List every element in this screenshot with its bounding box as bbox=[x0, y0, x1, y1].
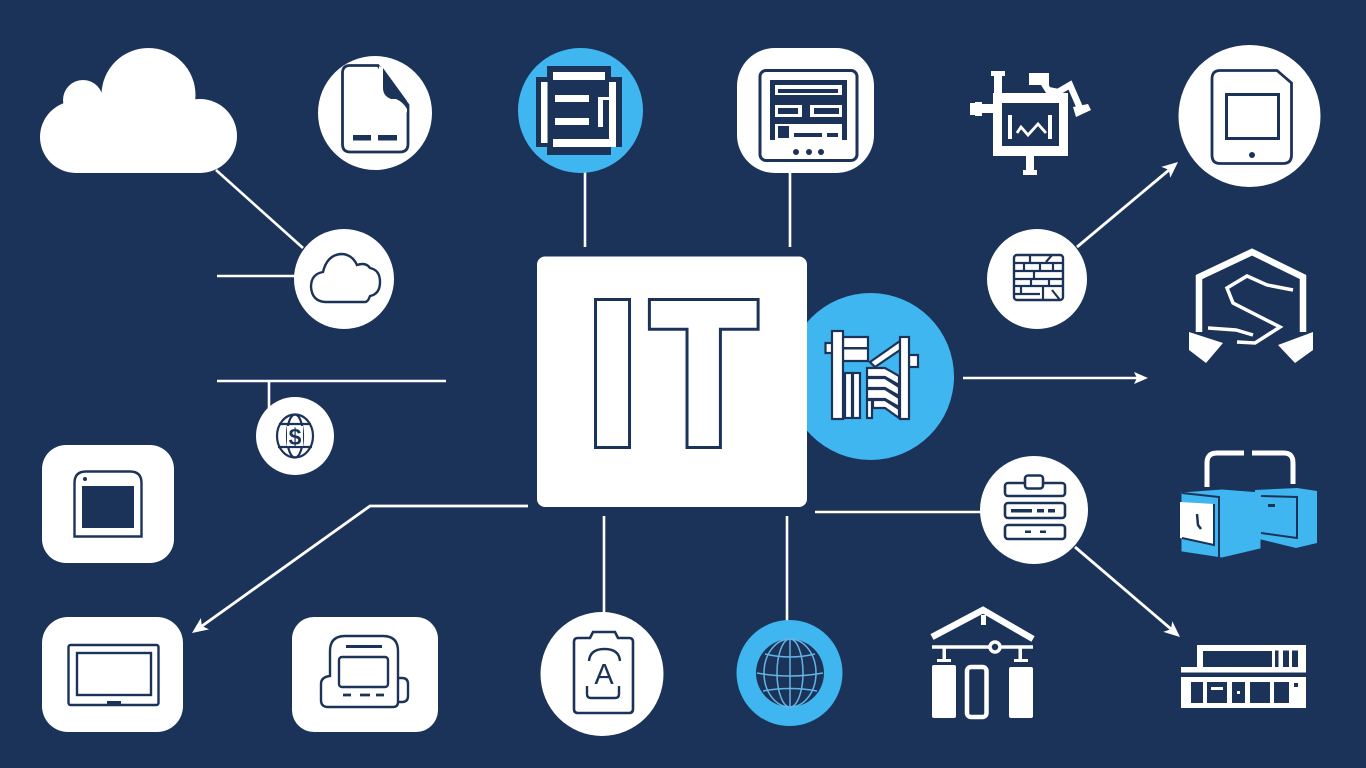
icon: blue circle with chart gate bbox=[787, 293, 954, 460]
connector lines bbox=[216, 170, 984, 622]
arrow: server circle to rack bbox=[1075, 547, 1180, 637]
icon: tablet circle bbox=[1178, 45, 1320, 187]
icon: server stack circle bbox=[980, 456, 1088, 564]
title: IT bbox=[588, 259, 755, 488]
icon: globe with dollar circle bbox=[256, 397, 334, 475]
icon: hexagon with route bbox=[1189, 252, 1313, 363]
icon: document circle bbox=[318, 56, 432, 170]
icon: web layout rounded square bbox=[737, 48, 874, 173]
icon: battery badge oval: A bbox=[594, 659, 614, 691]
icon: large cloud bbox=[40, 48, 237, 173]
icon: window square bbox=[42, 445, 174, 563]
arrow: brick circle to top-right tablet bbox=[1077, 162, 1178, 247]
title: IT: T bbox=[652, 259, 755, 488]
icon: tablet square bbox=[42, 617, 183, 732]
icon: globe with dollar circle: $ bbox=[289, 424, 302, 450]
icon: bank with pillars bbox=[932, 610, 1033, 718]
icon: brick firewall circle bbox=[987, 229, 1087, 329]
icon: centre IT card bbox=[537, 256, 807, 507]
icon: device square bbox=[292, 617, 438, 732]
arrow: centre to lower-left tablet bbox=[192, 506, 528, 633]
icon: small cloud circle bbox=[294, 229, 394, 329]
icon: machine with arm bbox=[970, 71, 1091, 175]
icon: rack unit bbox=[1181, 645, 1306, 708]
arrow: blue circle to hexagon bbox=[963, 372, 1148, 384]
icon: blue circle with document bbox=[518, 48, 643, 173]
icon: battery badge oval bbox=[540, 612, 664, 736]
icon: blue globe circle bbox=[736, 620, 842, 726]
icon: blue storage boxes bbox=[1180, 453, 1317, 557]
title: IT: I bbox=[588, 259, 637, 488]
